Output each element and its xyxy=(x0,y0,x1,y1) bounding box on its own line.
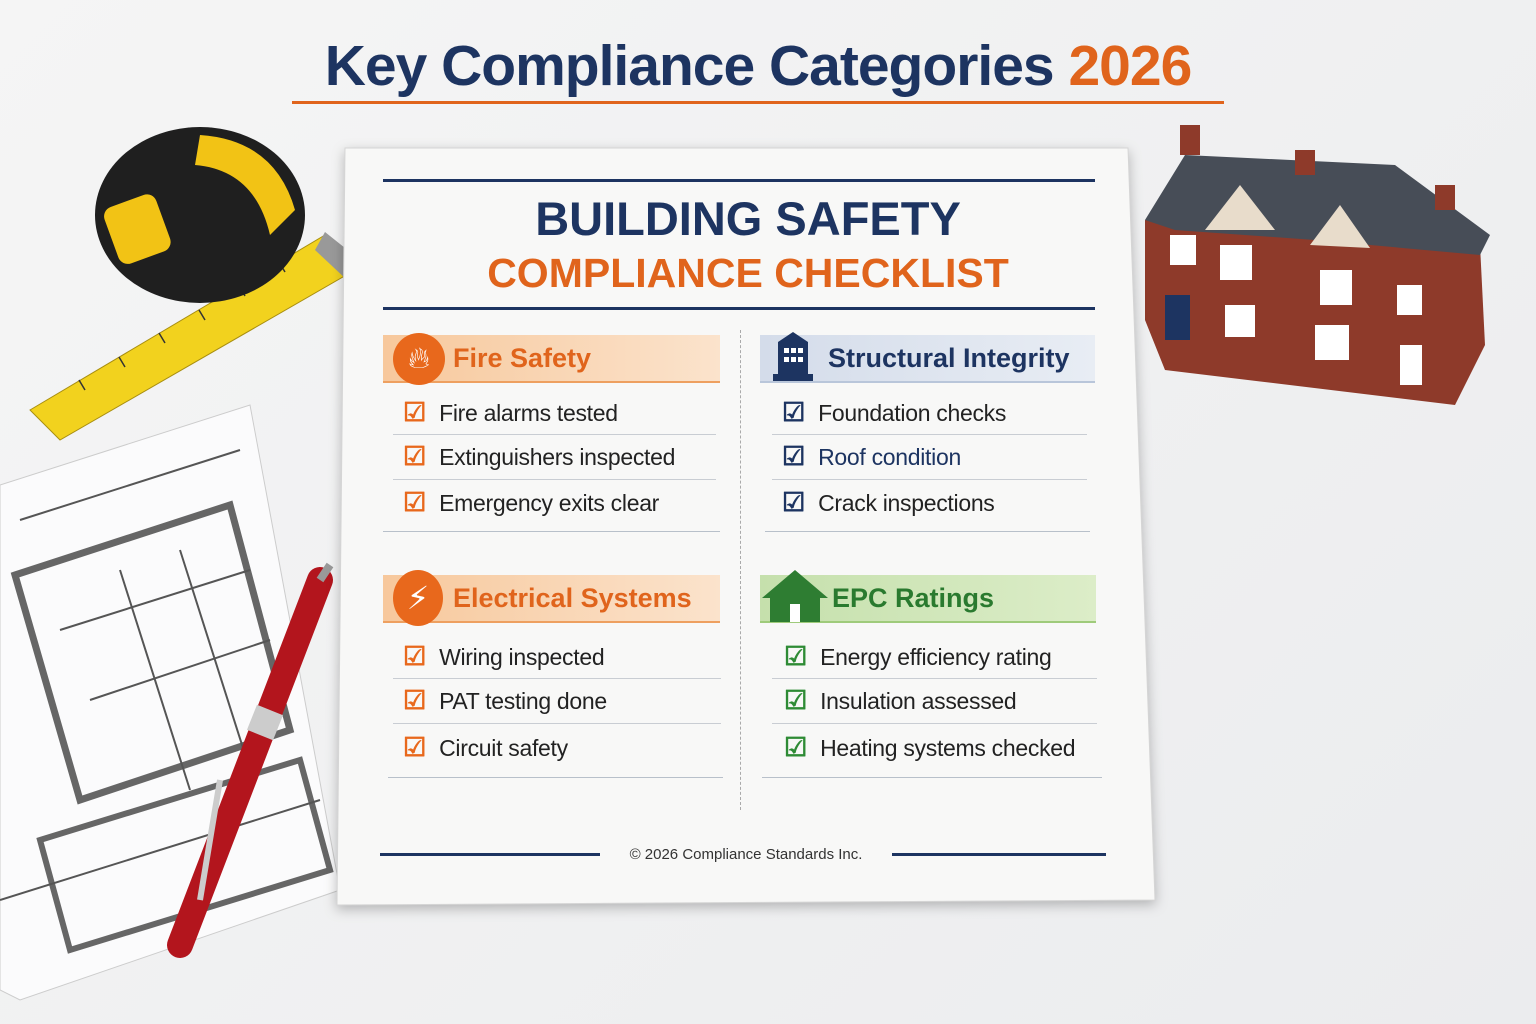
panel: fire safety: Emergency exits clear xyxy=(439,490,659,516)
panel: fire safety: ☑ xyxy=(403,487,426,517)
panel: EPC ratings: ☑ xyxy=(784,685,807,715)
footer: © 2026 Compliance Standards Inc. xyxy=(630,846,862,863)
house model xyxy=(1145,125,1490,405)
panel: EPC ratings: Energy efficiency rating xyxy=(820,644,1052,670)
panel: EPC ratings: ☑ xyxy=(784,732,807,762)
panel: fire safety: Extinguishers inspected xyxy=(439,444,675,470)
header: structural xyxy=(760,335,1095,383)
panel: electrical systems xyxy=(383,570,723,778)
panel: EPC ratings: Insulation assessed xyxy=(820,688,1016,714)
title: Key Compliance Categories 2026 xyxy=(325,34,1191,98)
panel: structural integrity: ☑ xyxy=(782,487,805,517)
panel: electrical systems: ☑ xyxy=(403,685,426,715)
tape measure xyxy=(29,127,344,441)
panel: electrical systems: Wiring inspected xyxy=(439,644,604,670)
panel: electrical systems: PAT testing done xyxy=(439,688,607,714)
panel: electrical systems: ☑ xyxy=(403,641,426,671)
panel: electrical systems: Circuit safety xyxy=(439,735,568,761)
icon: lightning xyxy=(393,570,443,626)
panel: structural integrity: ☑ xyxy=(782,441,805,471)
header: fire safety xyxy=(383,335,720,383)
panel: EPC ratings: Heating systems checked xyxy=(820,735,1075,761)
checklist heading: COMPLIANCE CHECKLIST xyxy=(487,250,1009,296)
icon: lightning: ⚡︎ xyxy=(407,580,429,616)
header: fire safety: Fire Safety xyxy=(453,343,591,373)
panel: structural integrity: Foundation checks xyxy=(818,400,1006,426)
header: EPC: EPC Ratings xyxy=(832,583,994,613)
panel: electrical systems: ☑ xyxy=(403,732,426,762)
icon: house xyxy=(762,570,828,622)
pen xyxy=(167,562,334,958)
header: electrical: Electrical Systems xyxy=(453,583,692,613)
panel: EPC ratings xyxy=(760,570,1102,778)
checklist heading xyxy=(487,192,1009,296)
header: structural: Structural Integrity xyxy=(828,343,1070,373)
panel: fire safety xyxy=(383,333,720,532)
panel: fire safety: Fire alarms tested xyxy=(439,400,618,426)
icon: flame xyxy=(393,333,445,385)
footer xyxy=(380,846,1106,863)
panel: structural integrity xyxy=(760,332,1095,532)
panel: structural integrity: Roof condition xyxy=(818,444,961,470)
icon: flame: 🔥︎ xyxy=(408,342,430,375)
header: electrical xyxy=(383,575,720,623)
panel: fire safety: ☑ xyxy=(403,441,426,471)
panel: EPC ratings: ☑ xyxy=(784,641,807,671)
panel: structural integrity: Crack inspections xyxy=(818,490,995,516)
panel: structural integrity: ☑ xyxy=(782,397,805,427)
blueprint xyxy=(0,404,337,1000)
icon: building xyxy=(773,332,813,381)
panel: fire safety: ☑ xyxy=(403,397,426,427)
checklist heading: BUILDING SAFETY xyxy=(535,192,961,245)
header: EPC xyxy=(760,575,1096,623)
